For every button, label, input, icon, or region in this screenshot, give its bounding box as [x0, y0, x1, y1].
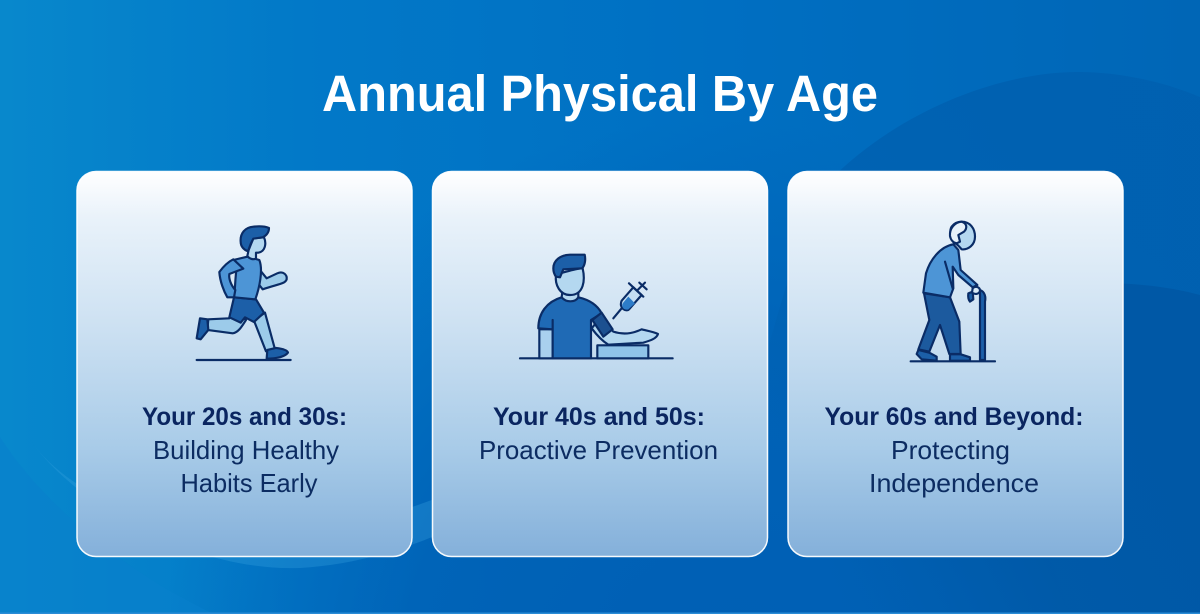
panel: your 60s and beyond [788, 172, 1123, 556]
card text [824, 403, 1084, 498]
card text: Your 60s and Beyond: [824, 403, 1084, 431]
card text [142, 403, 347, 498]
icon: man with blood pressure cuff and syringe [520, 255, 673, 358]
title: Annual Physical By Age [322, 65, 878, 122]
card text: Your 20s and 30s: [142, 403, 347, 431]
card text: Building Healthy [153, 435, 339, 465]
card text: Protecting [891, 435, 1010, 465]
card text: Your 40s and 50s: [493, 403, 705, 431]
icon: elderly man with cane [911, 222, 995, 361]
card text: Habits Early [180, 468, 318, 498]
panel: your 20s and 30s [77, 172, 412, 556]
card text: Independence [869, 468, 1039, 498]
icon: running man [197, 226, 291, 360]
panel: your 40s and 50s [432, 172, 768, 556]
card text: Proactive Prevention [479, 435, 718, 465]
card text [479, 403, 718, 465]
